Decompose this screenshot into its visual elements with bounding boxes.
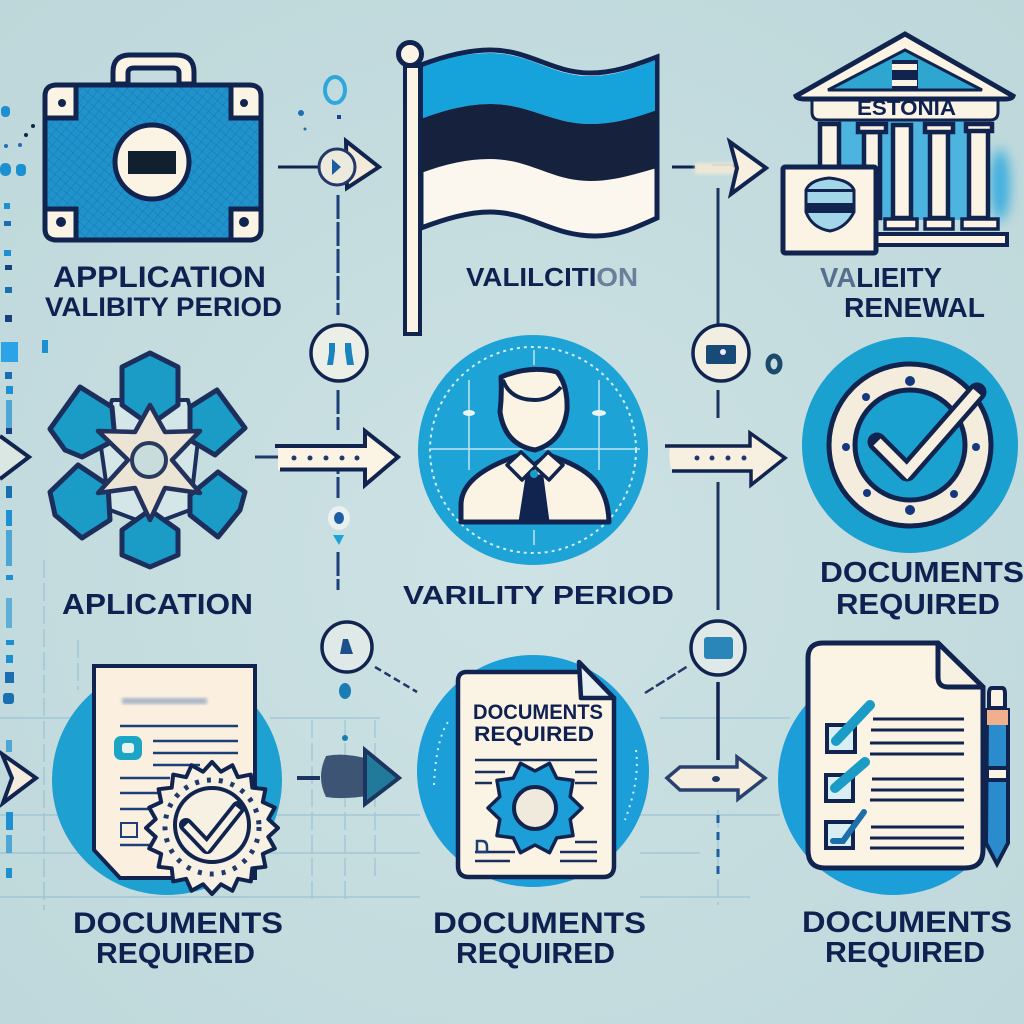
label: documents required: DOCUMENTS — [73, 907, 283, 940]
icon: node bell — [322, 622, 372, 672]
arrow: left edge lower — [2, 754, 36, 803]
label: documents required: REQUIRED — [96, 938, 255, 970]
icon: blue circle — [417, 655, 649, 887]
panel: checkmark — [802, 337, 1024, 621]
label: documents required inner — [473, 701, 603, 746]
icon: gear — [488, 763, 582, 853]
label: documents required: DOCUMENTS — [433, 907, 646, 940]
icon: pencil — [986, 688, 1008, 864]
arrow: top connector one — [278, 141, 379, 188]
icon: hexagon star cluster — [50, 353, 245, 567]
label: documents required: REQUIRED — [456, 938, 615, 970]
label: application validity period — [45, 261, 282, 322]
label: validity renewal: RENEWAL — [844, 292, 985, 323]
left dotted column — [0, 106, 48, 878]
connectors and nodes — [4, 77, 780, 880]
connector: left vertical — [336, 195, 340, 590]
panel: flag — [398, 42, 657, 334]
icon: blue circle — [778, 665, 1008, 895]
label: documents required: REQUIRED — [825, 937, 985, 969]
label: application validity period: APPLICATION — [53, 261, 266, 294]
arrow: middle connector one — [255, 431, 398, 485]
icon: approval seal — [146, 762, 278, 894]
icon: Estonian flag — [398, 42, 657, 334]
icon: node pin — [328, 506, 350, 545]
panel: application validity period — [45, 55, 282, 322]
panel: application — [50, 353, 253, 621]
label: documents required: DOCUMENTS — [820, 557, 1024, 589]
label: documents required inner: REQUIRED — [474, 723, 594, 746]
icon: document — [458, 662, 614, 877]
label: documents required — [820, 557, 1024, 621]
arrow: bottom connector two — [667, 757, 765, 799]
label: validity renewal: VALIEITY — [820, 262, 942, 293]
icon: node screen — [693, 325, 749, 381]
icon: suitcase — [45, 55, 261, 240]
label: documents required: DOCUMENTS — [802, 906, 1012, 939]
label: application: APLICATION — [62, 589, 253, 621]
label: documents required — [73, 907, 283, 970]
label: validity renewal — [820, 262, 985, 323]
panel: document with seal — [52, 665, 283, 970]
icon: bank building — [783, 34, 1013, 253]
connector: right vertical — [716, 188, 720, 610]
label: valilcition: VALILCITI ON — [466, 262, 638, 292]
panel: checklist — [778, 643, 1012, 969]
icon: checklist document — [808, 643, 983, 868]
arrow: bottom connector one — [297, 750, 399, 804]
icon: document — [94, 666, 255, 878]
icon: blue circle — [52, 665, 282, 895]
decorative dots — [768, 356, 780, 372]
icon: person with tie — [461, 369, 609, 522]
label: documents required — [802, 906, 1012, 969]
label: documents required — [433, 907, 646, 970]
icon: blue circle — [418, 335, 648, 565]
arrow: left edge upper — [0, 436, 29, 479]
panel: validity period — [403, 335, 674, 610]
label: application validity period: VALIBITY PERIOD — [45, 292, 282, 322]
arrow: middle connector two — [665, 433, 785, 485]
label: documents required inner: DOCUMENTS — [473, 701, 603, 724]
icon: check seal — [829, 364, 991, 526]
panel: document with gear — [417, 655, 649, 970]
label: documents required: REQUIRED — [836, 589, 1000, 621]
icon: blue circle — [802, 337, 1018, 553]
label: varility period: VARILITY PERIOD — [403, 580, 674, 610]
grid lines — [0, 560, 790, 910]
arrow: top connector two — [672, 142, 766, 194]
panel: estonia building — [783, 34, 1013, 323]
icon: node card — [691, 621, 745, 675]
dotted ring — [430, 347, 636, 553]
icon: node people — [311, 325, 367, 381]
label: estonia: ESTONIA — [857, 97, 956, 120]
